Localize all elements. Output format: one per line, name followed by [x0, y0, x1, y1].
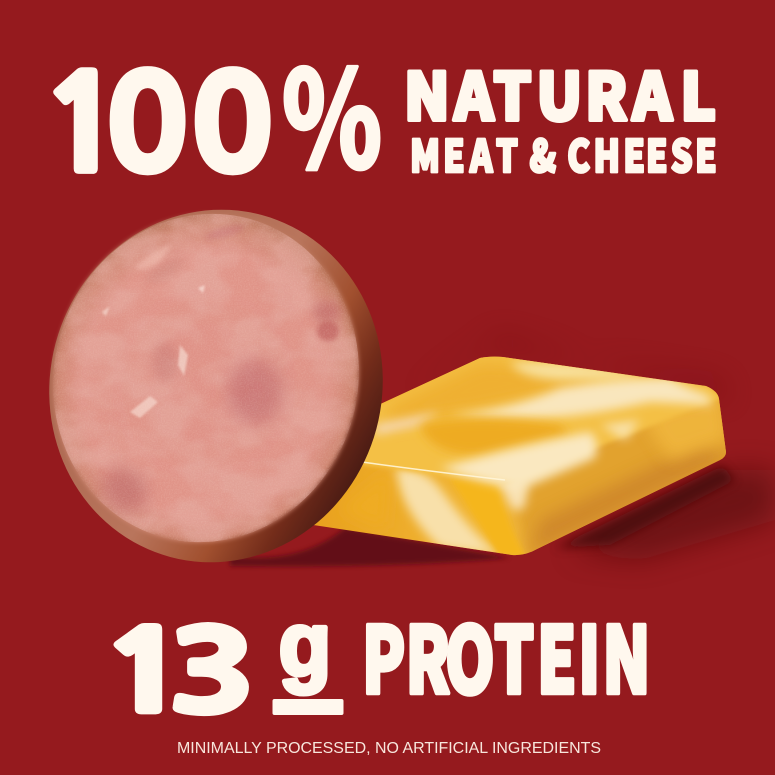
stat: g with underline: [272, 594, 344, 715]
stat: 13: 13: [102, 618, 255, 727]
title: 100%: [41, 14, 382, 207]
meat mottling: [54, 214, 359, 542]
cheese highlight edge: [362, 462, 505, 480]
footnote: MINIMALLY PROCESSED, NO ARTIFICIAL INGREDIENTS: [177, 740, 601, 757]
shadow under food: [230, 335, 775, 566]
meat light flecks: [137, 246, 169, 270]
title: 100%: %: [282, 14, 382, 207]
meat face: [16, 179, 396, 577]
meat grain: [53, 214, 359, 542]
stat: g with underline: g: [279, 594, 331, 694]
title: 100%: 100: [41, 60, 273, 191]
meat slice: [49, 210, 383, 562]
title: natural: NATURAL: [404, 45, 716, 139]
cheese front side marbling: [395, 468, 500, 556]
meat rim: [10, 172, 422, 600]
cheese right side shading: [519, 400, 726, 554]
cheese body: [300, 357, 726, 555]
title: meat and cheese: MEAT & CHEESE: [410, 122, 717, 185]
meat darker blotches: [227, 360, 283, 424]
stat: protein: PROTEIN: [362, 587, 651, 720]
cheese top face: [335, 355, 722, 484]
cheese cube: [300, 355, 735, 560]
